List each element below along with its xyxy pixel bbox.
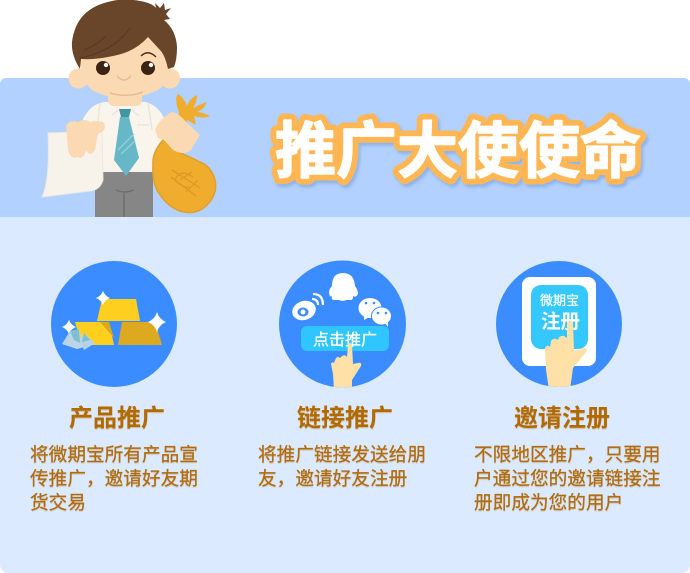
circle icon: invite registration <box>496 261 622 390</box>
gold bars <box>75 299 162 345</box>
blue disc <box>496 261 622 387</box>
neck and ears <box>68 68 180 106</box>
face <box>80 37 168 96</box>
shirt details <box>97 103 152 130</box>
text: product promotion: 货交易 <box>30 492 86 513</box>
blue disc <box>279 260 406 388</box>
tie <box>114 109 139 176</box>
heading: product promotion: 产品推广 <box>69 405 165 432</box>
heading: invite registration: 邀请注册 <box>514 405 610 432</box>
cyan screen <box>531 285 588 349</box>
content panel <box>0 217 690 573</box>
eyebrow <box>141 53 156 57</box>
heading: link promotion: 链接推广 <box>297 405 393 432</box>
title outline: 推广大使使命 <box>275 117 641 185</box>
text: product promotion: 将微期宝所有产品宣 <box>30 444 198 465</box>
text: link promotion: 友，邀请好友注册 <box>258 468 407 489</box>
eyes <box>96 61 155 75</box>
hand pointer <box>331 343 361 390</box>
hair shading <box>80 28 130 58</box>
trousers <box>95 168 153 217</box>
icon: wechat <box>358 298 392 327</box>
text: link promotion <box>258 444 426 489</box>
title fill: 推广大使使命 <box>275 117 641 185</box>
money bag tuft <box>176 94 210 125</box>
text: product promotion <box>30 444 198 513</box>
money bag <box>152 140 216 214</box>
diamonds <box>62 329 95 350</box>
nose and mouth <box>110 76 143 95</box>
icon: weibo <box>290 294 323 323</box>
right hand <box>155 112 200 153</box>
text: invite registration: 册即成为您的用户 <box>474 492 623 513</box>
text: link promotion: 将推广链接发送给朋 <box>258 444 426 465</box>
white phone card <box>522 277 596 366</box>
text: invite registration: 户通过您的邀请链接注 <box>474 468 661 489</box>
paper <box>42 131 103 197</box>
circle icon: gold bars <box>51 261 177 387</box>
circle icon: link sharing <box>279 260 406 390</box>
hair <box>72 0 177 69</box>
sparkles <box>62 291 166 334</box>
header band <box>0 78 690 217</box>
hand pointer <box>545 320 587 390</box>
screen text large: 注册 <box>541 311 580 333</box>
screen text: 微期宝 <box>540 293 579 308</box>
left hand <box>66 120 105 158</box>
character: man holding paper and money bag <box>42 0 216 217</box>
text: invite registration <box>474 444 661 513</box>
shirt <box>80 102 167 172</box>
title <box>275 117 641 185</box>
text: product promotion: 传推广，邀请好友期 <box>30 468 198 489</box>
blue disc <box>51 261 177 387</box>
text: invite registration: 不限地区推广，只要用 <box>474 444 661 465</box>
icon: QQ penguin <box>329 273 358 301</box>
button: 点击推广 <box>313 331 377 349</box>
